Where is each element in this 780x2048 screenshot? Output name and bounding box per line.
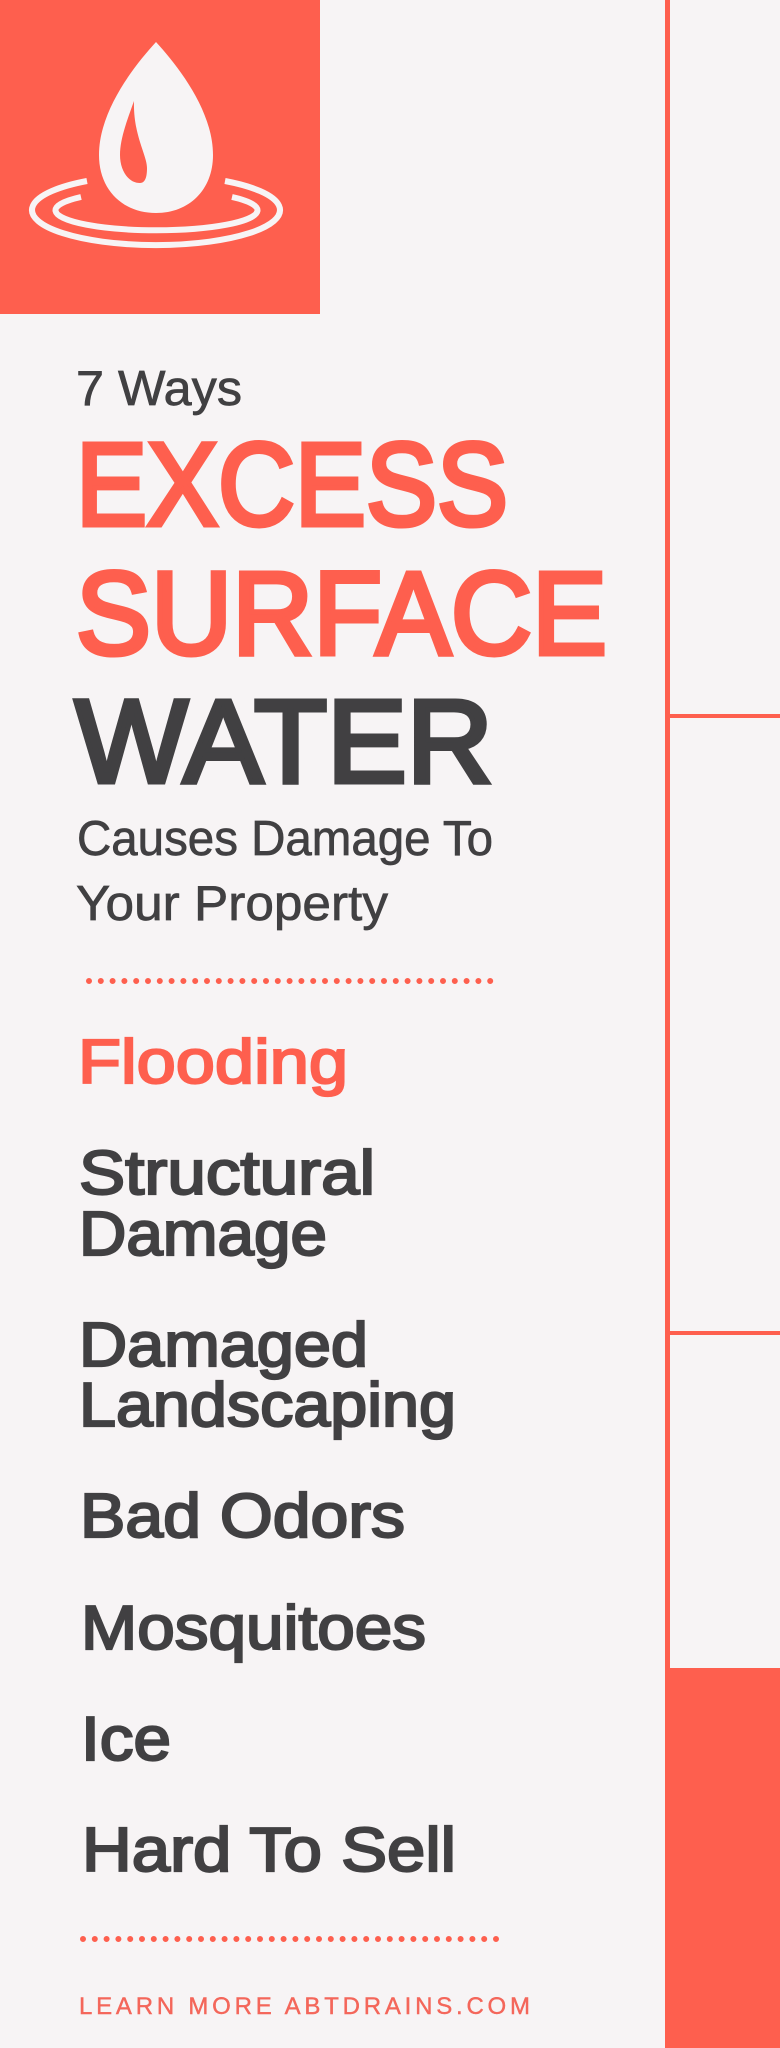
dotted divider: bottom (83, 1936, 498, 1942)
list item: Ice: Ice (81, 1705, 171, 1774)
icon: water drop (99, 42, 213, 213)
list item: Hard To Sell: Hard To Sell (82, 1816, 456, 1885)
title line: 7 Ways: 7 Ways (76, 362, 242, 416)
subtitle line: Causes Damage To: Causes Damage To (77, 812, 493, 866)
list item: Mosquitoes: Mosquitoes (81, 1594, 426, 1663)
subtitle line: Your Property: Your Property (76, 877, 389, 931)
list item: Structural Damage: Damage (79, 1200, 327, 1269)
call to action: website link: LEARN MORE ABTDRAINS.COM (79, 1993, 530, 2020)
list item: Bad Odors: Bad Odors (80, 1482, 405, 1551)
list item: Structural Damage (79, 1139, 375, 1269)
title line: EXCESS: EXCESS (76, 419, 508, 551)
icon: water ripples (32, 181, 280, 245)
title block (75, 362, 607, 931)
list item: Structural Damage: Structural (79, 1139, 375, 1208)
title line: SURFACE: SURFACE (76, 548, 607, 680)
list item: Damaged Landscaping: Damaged (79, 1311, 368, 1380)
list item: Damaged Landscaping (79, 1311, 456, 1440)
title line: WATER: WATER (75, 676, 493, 808)
dotted divider: top (89, 978, 491, 984)
list of damage types (78, 1028, 456, 1885)
panel: logo square with water drop icon (0, 0, 320, 314)
right column frame with lines and block (665, 0, 780, 2048)
list item: Damaged Landscaping: Landscaping (79, 1371, 456, 1440)
list item: Flooding: Flooding (78, 1028, 348, 1097)
